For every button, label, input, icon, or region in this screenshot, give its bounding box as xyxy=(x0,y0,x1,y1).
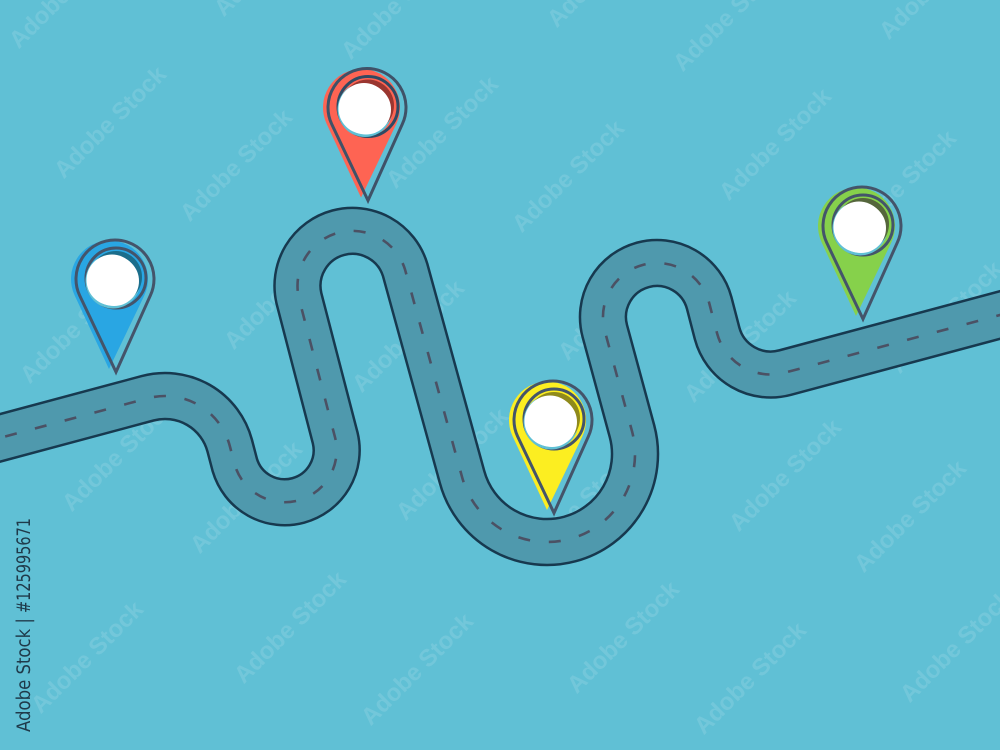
infographic canvas: Adobe Stock xyxy=(507,114,630,238)
infographic canvas: Adobe Stock xyxy=(57,393,180,517)
infographic canvas: Adobe Stock xyxy=(849,454,972,578)
infographic canvas: Adobe Stock xyxy=(553,242,676,366)
infographic canvas: Adobe Stock xyxy=(49,60,172,184)
infographic canvas: Adobe Stock xyxy=(689,616,812,740)
infographic canvas: Adobe Stock xyxy=(517,445,640,569)
infographic canvas: Adobe Stock xyxy=(347,274,470,398)
stock id side text: #125995671 xyxy=(14,518,35,613)
infographic canvas: Adobe Stock xyxy=(229,565,352,689)
pin: green xyxy=(818,187,901,319)
infographic canvas: Adobe Stock xyxy=(185,435,308,559)
infographic canvas: Adobe Stock xyxy=(381,70,504,194)
pin: yellow xyxy=(509,381,592,513)
infographic canvas: Adobe Stock xyxy=(679,284,802,408)
stock id side text: Adobe Stock | xyxy=(14,618,35,732)
stock id side text xyxy=(14,518,35,732)
infographic canvas: Adobe Stock xyxy=(175,103,298,227)
infographic canvas: Adobe Stock xyxy=(562,575,685,699)
pin: blue xyxy=(71,240,154,372)
infographic canvas: Adobe Stock xyxy=(391,402,514,526)
infographic canvas: Adobe Stock xyxy=(26,595,149,719)
infographic canvas: Adobe Stock xyxy=(219,231,342,355)
pin: red xyxy=(323,69,406,201)
winding road xyxy=(0,231,1000,542)
infographic canvas: Adobe Stock xyxy=(724,413,847,537)
infographic canvas: Adobe Stock xyxy=(839,124,962,248)
infographic canvas: Adobe Stock xyxy=(356,607,479,731)
infographic canvas: Adobe Stock xyxy=(714,82,837,206)
infographic canvas: Adobe Stock xyxy=(15,265,138,389)
